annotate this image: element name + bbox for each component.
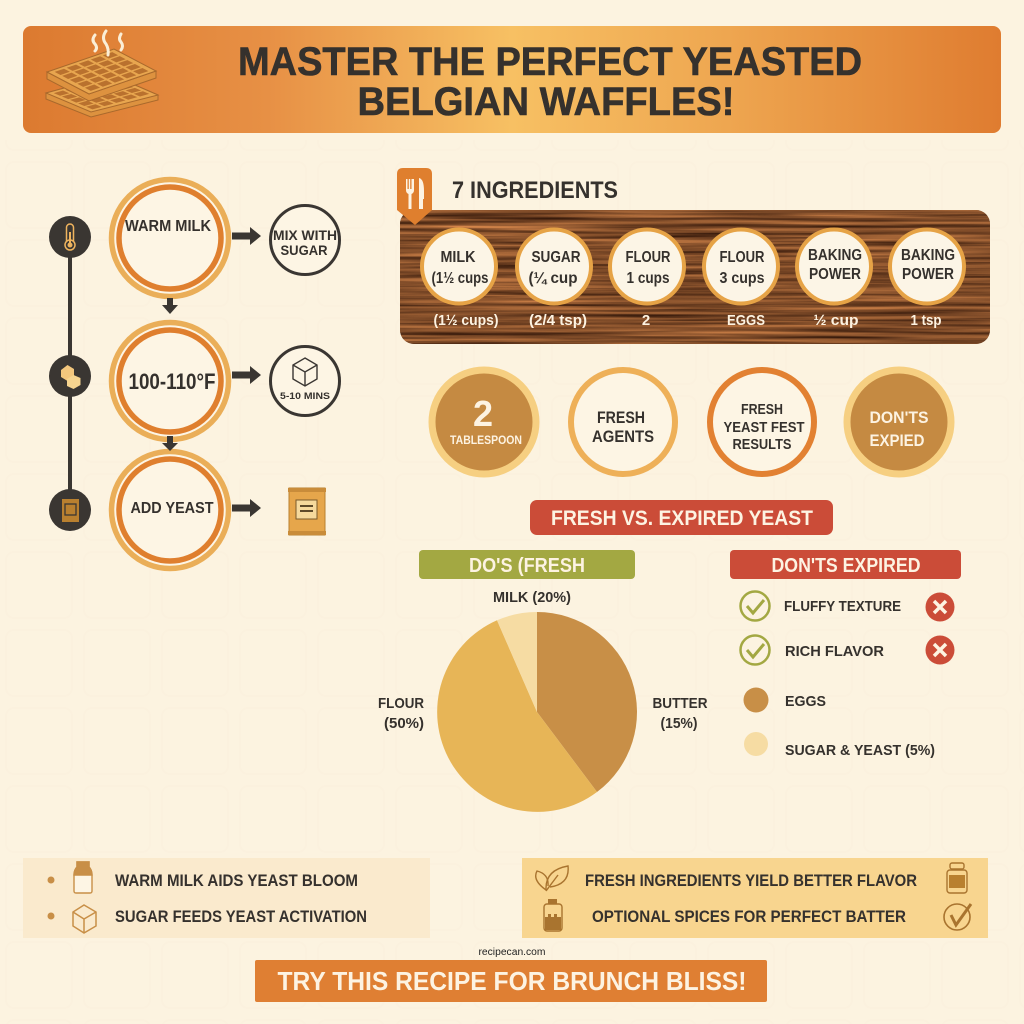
panel: milk and sugar tips: SUGAR FEEDS YEAST ACTIVATION [115,908,367,926]
ingredient: milk: (1½ cups [432,270,488,287]
pie label: butter: BUTTER [652,695,708,712]
step: rest time: 5-10 MINS [280,391,330,402]
ingredient: flour 3 cups: 3 cups [720,270,764,287]
heading: do's fresh [419,550,635,579]
pie chart [437,612,637,812]
icon: jar [947,863,967,893]
ingredient: baking power 2 [890,230,964,304]
icon: sugar cubes [49,355,91,397]
ingredient: milk [422,230,496,304]
pie label: milk: MILK (20%) [493,589,571,606]
badge: fresh yeast results: FRESH [741,401,783,418]
badge: fresh yeast results [710,370,814,474]
ingredient quantities: EGGS [727,312,765,329]
heading: don'ts expired [730,550,961,579]
arrow: to yeast packet [232,499,261,517]
pie label: flour: FLOUR [378,695,424,712]
call to action [255,960,767,1002]
badge: fresh yeast results: RESULTS [732,436,792,453]
slice: flour [437,620,597,812]
row: rich flavor [740,636,954,664]
badge: fresh agents [571,370,675,474]
step: warm milk: WARM MILK [125,218,211,235]
step: add yeast [112,452,228,568]
ingredient quantities: 2 [642,312,650,329]
icon: leaves [536,866,568,891]
row: rich flavor: RICH FLAVOR [785,643,884,660]
ingredient: sugar [517,230,591,304]
ingredient: flour 1 cups: 1 cups [626,270,670,287]
row: fluffy texture: FLUFFY TEXTURE [784,598,901,615]
icon: check [740,636,770,664]
legend: sugar and yeast: SUGAR & YEAST (5%) [785,742,935,759]
badge: don'ts expired [847,370,951,474]
ingredient quantities: 1 tsp [910,312,942,329]
step: mix with sugar [270,206,340,274]
panel: ingredients wood board [400,210,990,344]
ingredient: flour 1 cups: FLOUR [626,249,670,266]
arrow: to mix with sugar [232,227,261,245]
badge: fresh agents: AGENTS [592,427,654,446]
icon: spice jar [544,899,562,931]
heading: do's fresh: DO'S (FRESH [469,555,585,577]
ingredient quantities: ½ cup [814,312,858,329]
ingredient: baking power: BAKING [808,247,862,264]
icon: fork and knife tag [397,168,432,225]
ingredient: baking power [797,230,871,304]
source credit: recipecan.com [478,947,546,958]
call to action: TRY THIS RECIPE FOR BRUNCH BLISS! [278,966,746,996]
badge: don'ts expired: EXPIED [870,431,924,450]
icon: check [740,592,770,620]
ingredient: flour 3 cups: FLOUR [720,249,764,266]
legend: sugar and yeast [744,732,935,759]
bullet [48,912,54,920]
ingredient quantities: (2/4 tsp) [529,312,587,329]
icon: thermometer [49,216,91,258]
step: mix with sugar: MIX WITH [273,227,337,243]
panel: fresh ingredients tips [522,858,988,938]
icon: cross [926,636,954,664]
pie label: flour: (50%) [384,715,424,732]
icon: milk bottle [74,862,92,893]
panel: milk and sugar tips [23,858,430,938]
ingredient: baking power 2: POWER [902,266,954,283]
badge: don'ts expired: DON'TS [870,408,928,427]
icon: cube [293,358,317,386]
row: fluffy texture [740,592,954,622]
ingredient: sugar: (¼ cup [528,270,578,287]
ingredient: milk: MILK [440,249,476,266]
pie label: butter [652,695,708,732]
panel: fresh ingredients tips: FRESH INGREDIENTS YIELD BETTER FLAVOR [585,872,917,890]
icon: sugar cube [73,905,96,933]
ingredient: baking power 2: BAKING [901,247,955,264]
icon: yeast packet small [49,489,91,531]
legend: eggs: EGGS [785,693,826,710]
title banner [23,26,1001,133]
ingredient: flour 3 cups [704,230,778,304]
step: temperature: 100-110°F [128,369,216,394]
heading: fresh vs expired yeast [530,500,833,535]
ingredient: flour 1 cups [610,230,684,304]
heading: fresh vs expired yeast: FRESH VS. EXPIRED YEAST [551,507,813,530]
panel: fresh ingredients tips: OPTIONAL SPICES FOR PERFECT BATTER [592,908,906,926]
pie label: butter: (15%) [660,715,698,732]
icon: yeast packet [288,488,326,535]
ingredient quantities [434,312,942,329]
title text [238,40,862,124]
slice: butter and eggs [537,612,637,792]
icon: stacked waffles with steam [46,31,158,117]
ingredient quantities: (1½ cups) [434,312,498,329]
step: mix with sugar: SUGAR [280,242,328,258]
heading: don'ts expired: DON'TS EXPIRED [772,555,920,577]
ingredients heading: 7 INGREDIENTS [452,177,618,204]
pie label: flour [378,695,424,732]
slice: milk [497,612,537,712]
step: add yeast: ADD YEAST [130,500,214,517]
ingredients heading [397,168,618,225]
badge: 2 tablespoon [432,370,536,474]
arrow: down to add yeast [162,436,178,451]
title text: MASTER THE PERFECT YEASTED [238,40,862,84]
badge: fresh yeast results: YEAST FEST [724,419,804,436]
timeline rail with icons [49,216,91,531]
ingredient: baking power: POWER [809,266,861,283]
badge: 2 tablespoon: 2 [473,393,493,434]
legend: eggs [744,688,826,712]
arrow: to rest time [232,366,261,384]
step: temperature [112,322,228,440]
arrow: down to temperature [162,298,178,314]
step: warm milk [112,180,228,296]
step: rest time [270,346,340,416]
panel: milk and sugar tips: WARM MILK AIDS YEAST BLOOM [115,872,358,890]
badge: fresh agents: FRESH [597,408,645,427]
icon: cross [926,592,954,622]
bullet [48,876,54,884]
ingredient: sugar: SUGAR [532,249,580,266]
title text: BELGIAN WAFFLES! [358,80,734,124]
badge: 2 tablespoon: TABLESPOON [450,435,522,447]
icon: check mark [944,904,971,930]
